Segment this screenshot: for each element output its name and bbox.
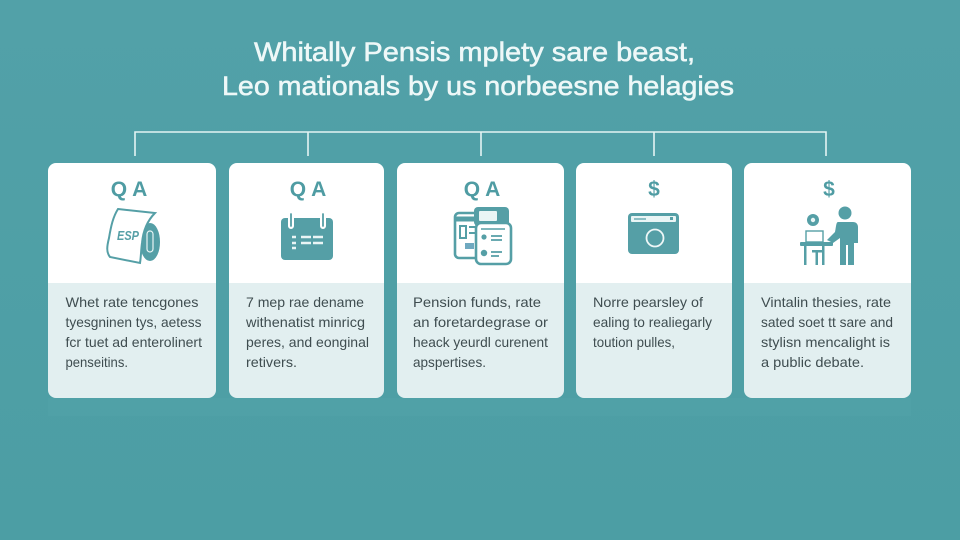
icon: paper roll: ESP — [117, 228, 139, 243]
title: Whitally Pensis mplety sare beast, — [254, 37, 695, 67]
description: card 5: stylisn mencalight is — [761, 334, 890, 350]
description: card 3: heack yeurdl curenent — [413, 334, 548, 350]
description: card 2: 7 mep rae dename — [246, 294, 364, 310]
description: card 1: fcr tuet ad enterolinert — [66, 334, 202, 350]
description: card 2: retivers. — [246, 354, 297, 370]
description: card 1 — [66, 294, 202, 370]
description: card 4: ealing to realiegarly — [593, 314, 712, 330]
description: card 4: toution pulles, — [593, 334, 675, 350]
description: card 5: sated soet tt sare and — [761, 314, 893, 330]
panel: card 2 — [229, 163, 384, 398]
panel: card 3 — [397, 163, 564, 398]
icon: calendar — [281, 214, 333, 260]
description: card 4 — [593, 294, 712, 350]
description: card 5 — [761, 294, 893, 370]
description: card 2: peres, and eonginal — [246, 334, 369, 350]
heading: card 2: Q A — [290, 178, 326, 201]
panel: card 5 — [744, 163, 911, 398]
description: card 3: apspertises. — [413, 354, 486, 370]
connector tree — [135, 132, 826, 156]
heading: card 1: Q A — [111, 178, 147, 201]
description: card 1: penseitins. — [66, 354, 128, 370]
description: card 5: Vintalin thesies, rate — [761, 294, 891, 310]
panel: card 1 — [48, 163, 216, 398]
description: card 2 — [245, 294, 369, 370]
description: card 3: an foretardegrase or — [413, 314, 548, 330]
icon: paper roll — [107, 209, 159, 263]
description: card 4: Norre pearsley of — [593, 294, 703, 310]
description: card 3 — [413, 294, 548, 370]
heading: card 3: Q A — [464, 178, 500, 201]
description: card 1: Whet rate tencgones — [66, 294, 198, 310]
description: card 2: withenatist minricg — [245, 314, 365, 330]
description: card 3: Pension funds, rate — [413, 294, 541, 310]
title — [222, 37, 734, 101]
title: Leo mationals by us norbeesne helagies — [222, 71, 734, 101]
heading: card 4: $ — [648, 178, 660, 201]
heading: card 5: $ — [823, 178, 835, 201]
icon: browser window — [628, 213, 679, 254]
description: card 5: a public debate. — [761, 354, 864, 370]
icon: documents — [455, 207, 511, 264]
description: card 1: tyesgninen tys, aetess — [66, 314, 202, 330]
panel: card 4 — [576, 163, 732, 398]
icon: person at desk — [800, 206, 858, 265]
